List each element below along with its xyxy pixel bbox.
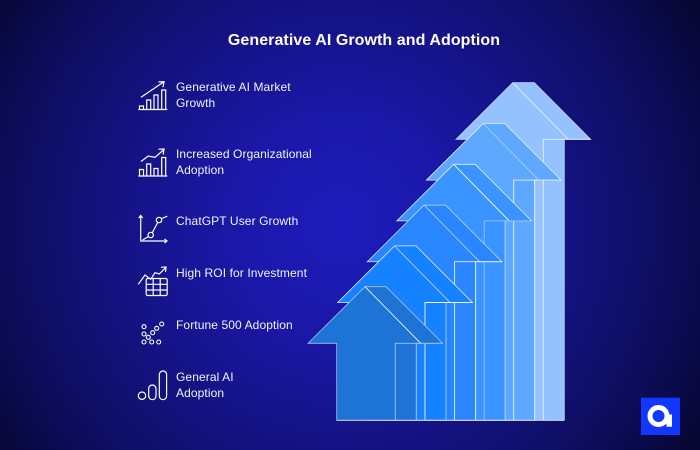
arrow 6 bbox=[456, 83, 591, 420]
icon: organizational adoption chart bbox=[138, 149, 167, 176]
label: Generative AI Market Growth: Generative AI Market bbox=[176, 80, 291, 94]
label: Increased Organizational Adoption bbox=[176, 147, 312, 176]
label: Fortune 500 Adoption: Fortune 500 Adoption bbox=[176, 318, 293, 332]
label: General AI Adoption: General AI bbox=[176, 370, 234, 384]
icon: user growth line chart bbox=[139, 216, 167, 243]
label: High ROI for Investment: High ROI for Investment bbox=[176, 266, 307, 280]
arrow 1 bbox=[308, 287, 443, 420]
label: ChatGPT User Growth: ChatGPT User Growth bbox=[176, 214, 298, 228]
title: Generative AI Growth and Adoption bbox=[228, 32, 500, 49]
label: Increased Organizational Adoption: Adoption bbox=[176, 162, 224, 176]
baseline bbox=[337, 419, 564, 421]
arrow 4 bbox=[397, 164, 532, 420]
label: Generative AI Market Growth bbox=[176, 80, 291, 110]
icon: scatter dots bbox=[142, 322, 164, 344]
icon: ROI table and trend bbox=[138, 267, 167, 296]
label: Increased Organizational Adoption: Increased Organizational bbox=[176, 147, 312, 161]
icon: logo bbox=[641, 398, 680, 435]
arrow 2 bbox=[338, 246, 472, 420]
arrow 3 bbox=[367, 205, 502, 420]
arrow 5 bbox=[426, 124, 561, 420]
icon: rising pills bbox=[138, 371, 167, 400]
icon: market growth bars bbox=[138, 82, 167, 110]
label: Generative AI Market Growth: Growth bbox=[176, 96, 215, 110]
label: General AI Adoption bbox=[176, 370, 234, 400]
label: General AI Adoption: Adoption bbox=[176, 386, 224, 400]
